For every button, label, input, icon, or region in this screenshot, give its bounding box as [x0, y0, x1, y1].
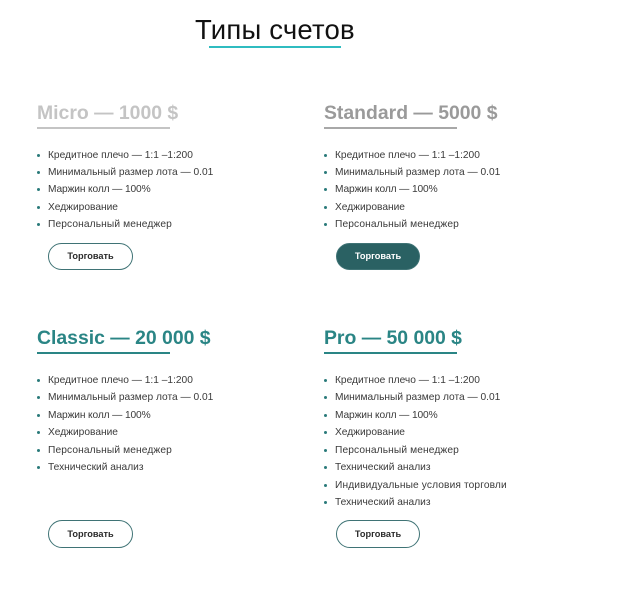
heading rule: Standard — [324, 127, 457, 129]
panel: Pro: Персональный менеджер — [335, 445, 459, 456]
panel: Micro: Минимальный размер лота — 0.01 — [48, 167, 213, 178]
panel: Classic — [37, 327, 213, 548]
button: Торговать — [48, 243, 133, 270]
heading rule: Classic — [37, 352, 170, 354]
heading: Classic: Classic — 20 000 $ — [37, 327, 211, 349]
panel: Pro: Хеджирование — [335, 427, 405, 438]
feature list: Standard — [324, 150, 500, 230]
heading: Micro: Micro — 1000 $ — [37, 102, 178, 124]
heading: Pro: Pro — 50 000 $ — [324, 327, 462, 349]
title underline — [209, 46, 341, 48]
button: Торговать: Торговать — [67, 251, 114, 261]
panel: Classic: Технический анализ — [48, 462, 144, 473]
panel: Micro: Хеджирование — [48, 202, 118, 213]
button: Торговать: Торговать — [355, 529, 401, 539]
title: Типы счетов — [195, 14, 355, 45]
panel: Pro: Кредитное плечо — 1:1 –1:200 — [335, 375, 480, 386]
panel: Pro: Индивидуальные условия торговли — [335, 480, 507, 491]
panel: Classic: Хеджирование — [48, 427, 118, 438]
panel: Micro — [37, 102, 213, 270]
panel: Classic: Минимальный размер лота — 0.01 — [48, 392, 213, 403]
panel: Pro: Технический анализ — [335, 497, 431, 508]
feature list: Classic — [37, 375, 213, 473]
panel: Micro: Кредитное плечо — 1:1 –1:200 — [48, 150, 193, 161]
heading rule: Micro — [37, 127, 170, 129]
feature list: Pro — [324, 375, 507, 508]
panel: Standard: Минимальный размер лота — 0.01 — [335, 167, 500, 178]
panel: Standard: Кредитное плечо — 1:1 –1:200 — [335, 150, 480, 161]
panel: Pro: Маржин колл — 100% — [335, 410, 438, 421]
heading rule: Pro — [324, 352, 457, 354]
feature list: Micro — [37, 150, 213, 230]
button: Торговать — [336, 520, 420, 548]
heading: Standard: Standard — 5000 $ — [324, 102, 498, 124]
panel: Pro: Минимальный размер лота — 0.01 — [335, 392, 500, 403]
panel: Standard: Персональный менеджер — [335, 219, 459, 230]
panel: Standard: Маржин колл — 100% — [335, 184, 438, 195]
panel: Micro: Маржин колл — 100% — [48, 184, 151, 195]
panel: Pro: Технический анализ — [335, 462, 431, 473]
panel: Classic: Кредитное плечо — 1:1 –1:200 — [48, 375, 193, 386]
panel: Classic: Маржин колл — 100% — [48, 410, 151, 421]
button: Торговать active: Торговать — [355, 251, 401, 261]
panel: Micro: Персональный менеджер — [48, 219, 172, 230]
button: Торговать: Торговать — [67, 529, 114, 539]
panel: Standard: Хеджирование — [335, 202, 405, 213]
button: Торговать active — [336, 243, 420, 270]
panel: Pro — [324, 327, 507, 548]
panel: Classic: Персональный менеджер — [48, 445, 172, 456]
button: Торговать — [48, 520, 133, 548]
panel: Standard — [324, 102, 500, 270]
